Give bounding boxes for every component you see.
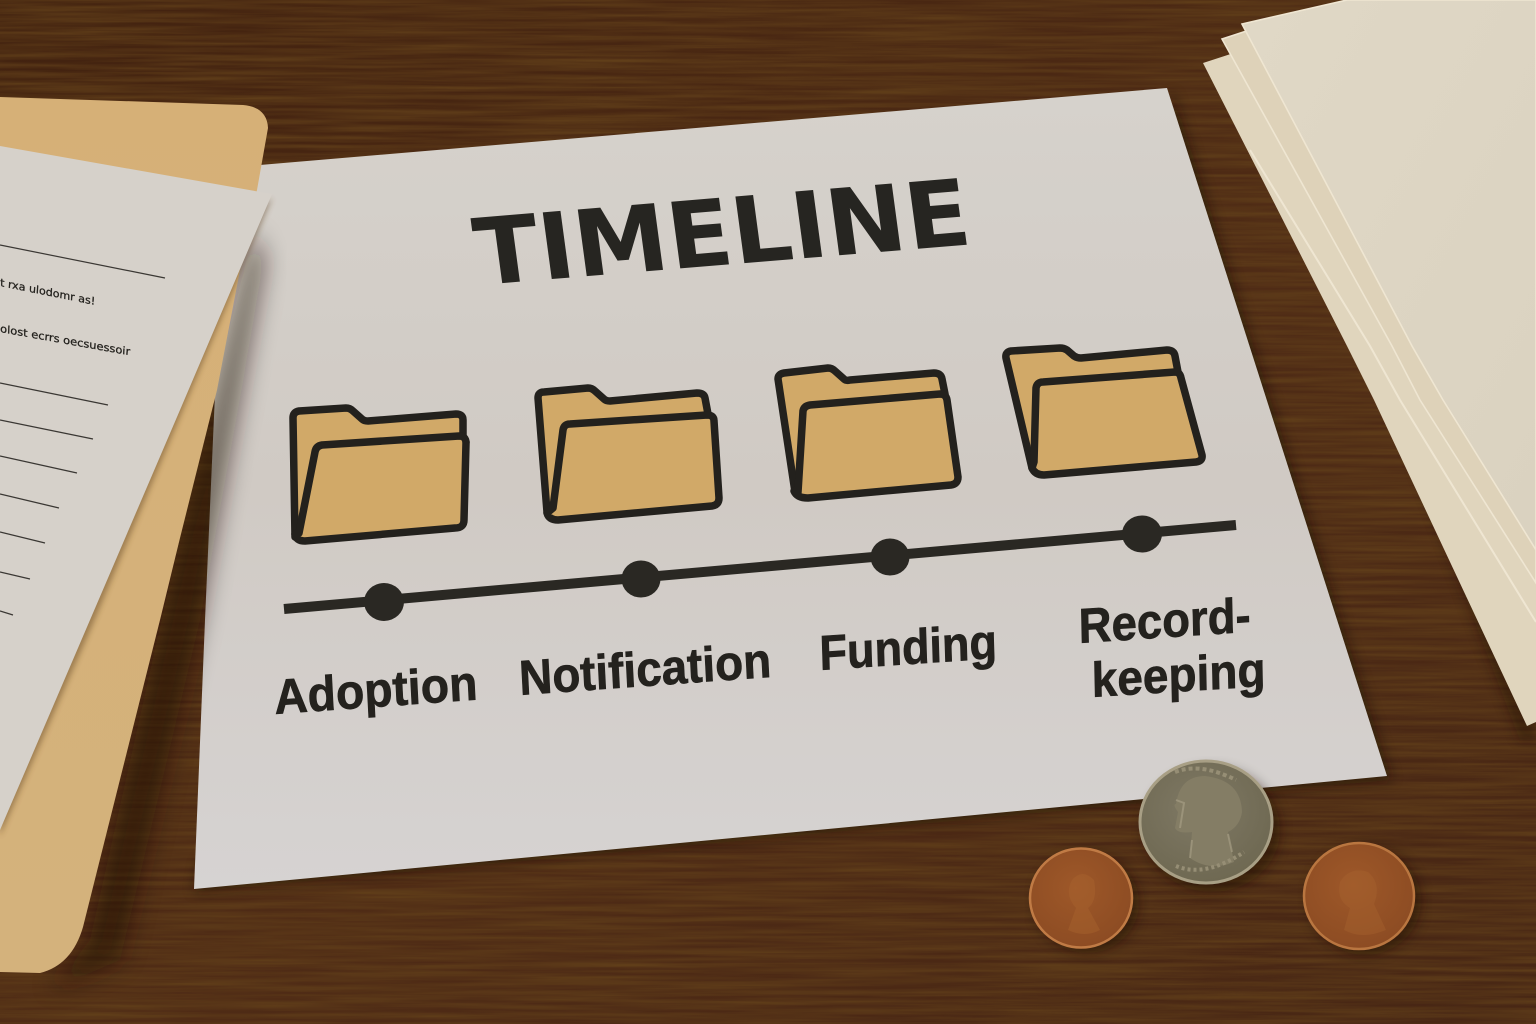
title: TIMELINE bbox=[468, 160, 977, 308]
label: adoption: Adoption bbox=[273, 656, 479, 725]
main timeline sheet bbox=[194, 88, 1387, 889]
label: notification: Notification bbox=[518, 634, 772, 706]
document rule bbox=[0, 245, 165, 278]
folder: record-keeping bbox=[1006, 348, 1202, 475]
document text line 2: olost ecrrs oecsuessoir bbox=[0, 323, 131, 358]
folder back bbox=[778, 368, 945, 492]
folder front bbox=[794, 394, 958, 498]
label: record-keeping: keeping bbox=[1091, 643, 1266, 708]
folder back bbox=[1006, 348, 1178, 468]
main paper shadow bbox=[194, 90, 1392, 892]
document text line 1: t rxa ulodomr as! bbox=[0, 276, 95, 308]
manila folder at left bbox=[0, 97, 268, 990]
folder front bbox=[1032, 372, 1202, 475]
timeline dot: funding bbox=[870, 538, 910, 576]
folder back bbox=[293, 408, 466, 537]
left document sheet bbox=[0, 146, 272, 836]
coin: right penny bbox=[1304, 843, 1421, 955]
document rules bbox=[0, 383, 108, 615]
timeline dot: record-keeping bbox=[1122, 516, 1162, 552]
folder: notification bbox=[538, 388, 719, 520]
coin: left penny bbox=[1030, 848, 1139, 953]
bottom sheet bbox=[1203, 50, 1536, 726]
timeline dot: adoption bbox=[364, 583, 404, 621]
timeline dot: notification bbox=[622, 560, 660, 598]
coin: quarter bbox=[1140, 761, 1280, 892]
top sheet bbox=[1242, 0, 1536, 550]
timeline line bbox=[284, 525, 1236, 609]
folder back bbox=[538, 388, 708, 512]
paper stack at top right bbox=[1203, 0, 1536, 740]
folder: funding bbox=[778, 368, 958, 498]
sheet edge highlight bbox=[1250, 150, 1536, 622]
label: record-keeping bbox=[1078, 588, 1266, 708]
label: funding: Funding bbox=[819, 613, 998, 680]
folder: adoption bbox=[293, 408, 466, 541]
folder front bbox=[295, 436, 466, 541]
folder front bbox=[547, 415, 719, 520]
label: record-keeping: Record- bbox=[1078, 588, 1251, 654]
middle sheet bbox=[1222, 26, 1536, 583]
